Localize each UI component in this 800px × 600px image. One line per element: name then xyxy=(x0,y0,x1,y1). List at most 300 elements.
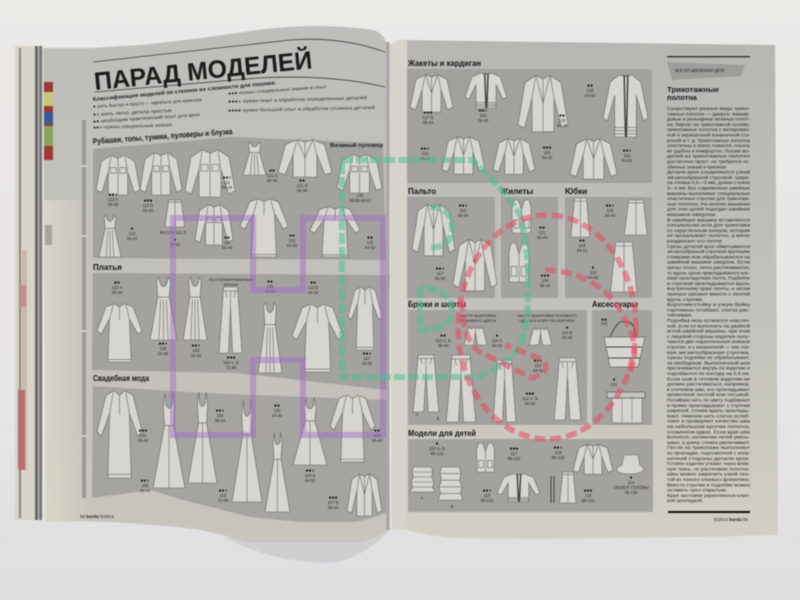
dress 122 А: 36-44 xyxy=(112,290,123,295)
left page light margin xyxy=(43,200,92,522)
knitted pullover: Вязаный пуловер xyxy=(330,142,383,149)
coat 117: 36-50 xyxy=(435,276,446,281)
sidebar article text: за свободным. Выполненный шов xyxy=(667,359,751,365)
dress 112 Б: 44-52 xyxy=(308,290,319,295)
bag xyxy=(600,317,645,367)
shirt 113 Б: ●●● xyxy=(143,198,153,204)
trousers 112: ●●● xyxy=(525,391,535,397)
jacket 118: 44-52 xyxy=(622,158,633,163)
sidebar article text: зигзагообразной строчкой крупными xyxy=(667,248,750,254)
belted wrap xyxy=(607,377,645,423)
child jacket 118: ●●◖ xyxy=(553,445,563,451)
panel: dresses xyxy=(92,273,390,390)
sidebar article text: то вдоль среза прикладывается кле- xyxy=(667,270,750,275)
halter gown: 36-44 xyxy=(215,418,226,423)
child skirt and belt: 98-122 xyxy=(581,498,595,503)
long shirt: 36-44 xyxy=(222,185,233,190)
top: 36-44 xyxy=(267,178,278,183)
classification legend: ●◖ шить легко, детали простые xyxy=(93,108,172,117)
sidebar article text: не прокалывает полотно, а мягко xyxy=(667,233,750,238)
jacket 127 Б: 127 Б xyxy=(423,115,434,120)
skirt 119: ●●◖ xyxy=(605,203,615,209)
vest 121: 121 xyxy=(538,230,546,235)
hat: ОБХВАТ ГОЛОВЫ xyxy=(613,485,649,490)
sidebar article text: Края застежки укрепляются клее- xyxy=(667,493,750,498)
gown 116 xyxy=(218,400,262,503)
slip dress xyxy=(258,279,282,373)
pink pattern shorts: РОЗОВОГО ЦВЕТА xyxy=(460,318,496,323)
sidebar article text: обенных знаний и приемов. xyxy=(667,163,727,169)
watermark: purple outline xyxy=(173,218,383,435)
pink pattern shorts: 114 А xyxy=(492,338,503,343)
sidebar article text: ночной стороны детали кроя. xyxy=(667,455,750,461)
gown 105: 34-44 xyxy=(140,488,151,493)
slim trousers: 110 xyxy=(535,363,542,368)
dress 112 Б: 112 Б xyxy=(308,285,319,290)
sidebar article text: специальная игла для трикотажа xyxy=(667,223,750,228)
vest 121 xyxy=(512,200,548,240)
tiered skirt: 44-52 xyxy=(588,275,599,280)
jacket 118 xyxy=(570,139,633,179)
skirt 118 xyxy=(571,198,590,253)
sidebar article text: их удобно и комфортно. Пошив мо- xyxy=(667,148,750,153)
panel: coats xyxy=(407,197,497,298)
knitted pullover xyxy=(330,142,383,203)
hat xyxy=(613,455,649,495)
trousers 112: 44-52 xyxy=(525,401,536,406)
sidebar section tag xyxy=(667,62,745,80)
cardigan 125: ●● xyxy=(587,83,593,89)
child jacket xyxy=(480,474,540,503)
pink pattern shorts: 112 А, Б xyxy=(435,338,451,343)
blouse 111 xyxy=(195,205,233,250)
sidebar article text: ных полотен. На многих машинах xyxy=(667,201,751,206)
bag: 142 xyxy=(600,321,608,326)
biker jacket: 36-42 xyxy=(420,156,431,161)
classification legend: Классификация моделей по степени их сложности для пошива: xyxy=(93,79,277,103)
magazine paper stack xyxy=(15,46,43,520)
halter gown: ●●◖ xyxy=(215,408,225,414)
sidebar article text: со скругленным концом, которая xyxy=(667,228,751,233)
pink pattern shorts right: ● xyxy=(565,325,569,331)
pink pattern shorts right xyxy=(517,313,577,345)
long flowing cardigan: 103 xyxy=(558,118,566,123)
dress 122 А: ●● xyxy=(114,280,120,286)
top, pattern 111 Б xyxy=(160,200,186,247)
shrug: ●●● xyxy=(328,495,338,501)
sidebar article text: сложенном вдвое. Если края шва xyxy=(667,429,750,434)
pink pattern shorts: ●● xyxy=(440,333,446,339)
vest 104: 104 xyxy=(542,278,549,283)
sidebar article text: роной и т. д. Трикотажные полотна xyxy=(667,137,750,143)
heading: shirts and tops: Рубашки, топы, туники, пуловеры и блузка xyxy=(92,127,233,146)
dress 122 А: 122 А xyxy=(112,285,123,290)
sidebar article text: тажных полотен — джерси, жаккар- xyxy=(667,111,750,116)
dress 130: 130 xyxy=(274,408,281,413)
sidebar article text: эластичные строчки для трикотаж- xyxy=(667,196,750,201)
dress with sleeves: 104 xyxy=(374,433,381,438)
child jacket: 98-122 xyxy=(480,498,494,503)
wrap blouse xyxy=(278,140,332,193)
heading: vests: Жилеты xyxy=(500,187,533,196)
sidebar article text: должен растягиваться, например, xyxy=(667,382,750,387)
sidebar article text: для этих целей подходит швейная xyxy=(667,206,751,212)
child jacket 118: 98-122 xyxy=(551,455,565,460)
heading: trousers and shorts: Брюки и шорты xyxy=(408,300,466,309)
child vest: 98-122 xyxy=(507,456,521,461)
dress 106 Б xyxy=(293,398,327,483)
hat: ● xyxy=(629,475,633,481)
long shirt xyxy=(185,150,235,197)
wrap blouse: 121 Б xyxy=(297,183,308,188)
panel: bridal fashion xyxy=(92,386,387,522)
gown 116: 72-88 xyxy=(218,498,229,503)
blouse 111: 111 xyxy=(224,240,231,245)
classification legend: ● шить быстро и просто — идеально для новичков xyxy=(93,97,202,109)
dress 130: ●● xyxy=(274,403,280,409)
tunic: ●●◖ xyxy=(362,351,372,357)
gown 116: ●●◖ xyxy=(218,488,228,494)
sidebar article text: Подгибка низа останется эластич- xyxy=(667,318,750,323)
panel: vests xyxy=(501,197,558,298)
sidebar article text: иглой швейной машины, при этом xyxy=(667,328,750,334)
coat 110 xyxy=(412,203,469,256)
shirt 113 Б: 34-42 xyxy=(143,208,154,213)
jacket 118: ●●◖ xyxy=(622,148,632,154)
heading: coats: Пальто xyxy=(408,187,436,196)
sidebar article text: срезы плохо, легко растягиваются, xyxy=(667,265,750,270)
tank dress xyxy=(99,215,138,257)
belted wrap: ● xyxy=(612,377,616,383)
jumpsuit: БРЮКИ xyxy=(224,282,238,287)
trousers Б: Б xyxy=(437,416,440,421)
sidebar article text: припуск срезают вместе с лентой xyxy=(667,290,750,296)
gown 116: 116 xyxy=(220,493,227,498)
blouse 121: 44-52 xyxy=(365,245,376,250)
dress 122 А xyxy=(97,280,142,362)
jumpsuit: 116 А, Б xyxy=(223,360,239,365)
jumpsuit xyxy=(209,277,253,370)
vertical imprint text xyxy=(80,120,88,498)
child jacket 118 xyxy=(551,444,613,474)
sidebar article text: тягивая. xyxy=(667,313,693,318)
sidebar heading: Трикотажные xyxy=(667,85,719,94)
hat: 114 xyxy=(628,480,635,485)
blouse 122: 44-52 xyxy=(287,243,298,248)
classification legend, second column: ●●●● нужен большой опыт в обработке сложных деталей xyxy=(228,104,375,113)
dress 155: 155 xyxy=(160,346,167,351)
sidebar article text: притачивается внутрь по изделию и xyxy=(667,366,750,371)
child jacket: 119 xyxy=(484,493,491,498)
dress 106 Б: 44-52 xyxy=(305,478,316,483)
jacket 118: 118 xyxy=(624,153,631,158)
frill skirt A xyxy=(410,467,435,500)
pink pattern shorts: ● xyxy=(495,333,499,339)
sidebar article text: шириной, стежки вдоль проклады- xyxy=(667,407,750,413)
slip dress: ●● xyxy=(267,279,273,285)
bag: ●● xyxy=(601,317,607,323)
sidebar article text: подгибается по контуру на 0,5 см. xyxy=(667,371,750,376)
sidebar article text: внутреннему краю ленты, а затем xyxy=(667,286,750,291)
sidebar article text: вают. Нижнюю нить слегка ослаб- xyxy=(667,413,750,418)
jumpsuit: КОСТЮМИРОВАННЫЕ xyxy=(209,277,253,282)
sidebar section tag: ВСЁ ПО ШВЕЙНОМУ ДЕЛУ xyxy=(675,66,725,73)
vest 104: 36-44 xyxy=(540,283,551,288)
sidebar article text: Детали кроя соединяются узкой xyxy=(667,169,750,175)
shirt 113 Б xyxy=(140,153,182,213)
jumpsuit: 72-88 xyxy=(226,365,237,370)
sidebar article text: Если шов в готовом изделии не xyxy=(667,376,750,381)
jacket 116: 116 xyxy=(544,150,551,155)
trousers 112: 112 А, Б xyxy=(522,396,538,401)
shirt 113 A: ●●◖ xyxy=(108,192,118,198)
sidebar article text: той из тонкого клеевого флизелина. xyxy=(667,476,750,482)
child vest xyxy=(476,443,521,472)
top, pattern 111 Б: ● xyxy=(173,237,177,243)
jacket 127 Б: ●●● xyxy=(423,110,433,116)
skirt 119: 119 xyxy=(607,208,614,213)
classification legend xyxy=(93,79,277,130)
left page xyxy=(43,26,390,543)
sidebar article text: зигзагообразной строчкой: шири- xyxy=(667,174,750,180)
skirt 118: 34-42 xyxy=(577,248,588,253)
panel: skirts xyxy=(565,197,652,298)
watermark: red dashed circles xyxy=(458,215,636,439)
skirt 119: 36-44 xyxy=(605,213,616,218)
sidebar article text: Вместо строчки и подгибки можно xyxy=(667,482,750,487)
jacket 102: ●●◖ xyxy=(478,108,488,114)
shrug: 36-44 xyxy=(328,505,339,510)
sidebar article text: волнятся, натяжение нитей умень- xyxy=(667,434,750,440)
blouse 121: 121 xyxy=(366,240,374,245)
tank dress: ● xyxy=(130,226,134,232)
shirt 113 A: 113 А xyxy=(108,197,119,202)
right page gutter xyxy=(389,40,407,530)
child jacket 118: 118 xyxy=(555,450,562,455)
right page xyxy=(389,40,778,539)
sidebar article text: Швы можно закрепить узкой лен- xyxy=(667,471,750,477)
blouse 122: 122 xyxy=(288,238,296,243)
classification legend: ●●◖ нужны специальные знания xyxy=(93,122,172,130)
jacket 102: 102 xyxy=(480,113,487,118)
panel: jackets and cardigan xyxy=(407,69,652,183)
dress 130 xyxy=(265,403,290,512)
top: ●● xyxy=(269,168,275,174)
skirt 119 xyxy=(605,200,647,235)
sidebar article text: ляют и проверяют качество шва xyxy=(667,419,750,424)
sidebar article text: горловины отгибают, слегка рас- xyxy=(667,307,751,312)
heading: jackets and cardigan: Жакеты и кардиган xyxy=(407,59,481,68)
sidebar article text: довые и рельефные вязаные полот- xyxy=(667,117,750,122)
classification legend: ●● необходим практический опыт для кроя xyxy=(93,111,200,124)
sidebar article text: делей из трикотажных полотен xyxy=(667,153,750,159)
coat dress: ●●● xyxy=(138,428,148,434)
classification legend, second column: ●●● нужны специальные знания и опыт xyxy=(228,84,328,96)
sidebar article text xyxy=(667,106,751,503)
blouse 122 xyxy=(240,199,298,257)
dress 155 Б: 155 xyxy=(192,348,200,353)
sidebar article text: Петли на трикотаже выполняют xyxy=(667,445,751,450)
sidebar article text: с лицевой стороны изделия полу- xyxy=(667,333,750,339)
belted wrap: 101 xyxy=(610,382,618,387)
sidebar article text: шают, а длину стежка увеличивают. xyxy=(667,440,750,445)
sidebar article text: ной и окрашенной изнаночной сто- xyxy=(667,132,750,138)
halter gown: 106 xyxy=(216,413,224,418)
sidebar article text: кая зигзагообразная строчка. xyxy=(667,350,750,355)
child skirt and belt: ●●● xyxy=(583,488,593,494)
biker jacket: 115 xyxy=(422,151,429,156)
knitted pullover: 36/38,40/42 xyxy=(349,198,372,203)
blouse 111: 36-44 xyxy=(222,245,233,250)
jacket 116: ●●● xyxy=(542,145,552,151)
gown 105 xyxy=(140,393,185,493)
gutter shadow xyxy=(386,42,390,530)
frill skirt Б: ● xyxy=(435,441,439,447)
long flowing cardigan: ●● xyxy=(559,113,565,119)
heading: bridal fashion: Свадебная мода xyxy=(93,374,149,383)
sidebar top rule xyxy=(667,56,750,57)
sidebar article text: по прокладке, подложенной с изна- xyxy=(667,450,750,456)
heading: dresses: Платья xyxy=(93,263,122,272)
tunic: 44-52 xyxy=(362,361,373,366)
title: ПАРАД МОДЕЛЕЙ xyxy=(93,44,314,96)
cardigan 125: 125 xyxy=(586,88,594,93)
sidebar article text: ной, если ее выполнить на двойной xyxy=(667,322,750,328)
trousers Б xyxy=(437,355,476,422)
coat dress xyxy=(97,391,149,478)
vest 104 xyxy=(509,243,551,288)
heading: models for children: Модели для детей xyxy=(408,429,476,438)
long flowing cardigan: 36-44 xyxy=(557,123,568,128)
blouse 121 xyxy=(310,207,376,257)
dress 155: 34-42 xyxy=(158,351,169,356)
dress 155 Б: ●●◖ xyxy=(191,343,201,349)
coat 110: ●●◖ xyxy=(458,203,468,209)
biker jacket: ●●◖ xyxy=(420,146,430,152)
child skirt and belt: 119 xyxy=(585,493,592,498)
shirt 113 Б: 113 Б xyxy=(143,203,154,208)
hat: 55 СМ xyxy=(625,490,638,495)
gown 105: ●●◖ xyxy=(140,478,150,484)
heading: skirts: Юбки xyxy=(565,187,587,196)
child jacket: ●●◖ xyxy=(482,488,492,494)
jumpsuit: ●●● xyxy=(226,355,236,361)
jacket 102 xyxy=(465,73,507,123)
sidebar article text: Срезы деталей кроя обметываются xyxy=(667,243,750,249)
frill skirt Б: 116 А, Б xyxy=(429,446,445,451)
sidebar article text: вой прокладкой. xyxy=(667,497,703,503)
jacket 116: 34-42 xyxy=(542,155,553,160)
biker jacket xyxy=(420,137,485,174)
dress 130: 34-42 xyxy=(272,413,283,418)
long flowing cardigan xyxy=(518,75,568,132)
long shirt: 111 xyxy=(224,180,231,185)
frill skirt A: А xyxy=(421,495,424,500)
skirt 118: 118 xyxy=(579,243,586,248)
jacket 116 xyxy=(493,139,553,174)
trousers A xyxy=(413,355,439,417)
shirt 113 A: 36-50 xyxy=(108,202,119,207)
vest 104: ●●● xyxy=(540,273,550,279)
frill skirt Б: Б xyxy=(451,504,454,509)
sidebar article text: Потайную нить по цвету подбирают xyxy=(667,396,751,402)
top, pattern 111 Б: ФАСОН 111 Б xyxy=(160,230,186,235)
tank dress: 110 xyxy=(129,231,136,236)
tunic: 117 xyxy=(364,356,371,361)
tunic xyxy=(348,287,382,366)
dress 106 Б: ●●◖ xyxy=(305,468,315,474)
title rules xyxy=(93,39,385,92)
coat dress: 36-44 xyxy=(138,438,149,443)
classification legend, second column xyxy=(228,84,375,113)
sidebar article text: и прямо прокладывают с строчки xyxy=(667,403,750,408)
sidebar article text: Срезы подгибки не обрабатывают, xyxy=(667,355,750,360)
long shirt: ●●◖ xyxy=(222,175,232,181)
sidebar article text: и строчкой прокладывается вдоль xyxy=(667,280,751,286)
sidebar article text: В швейную машину вставляется xyxy=(667,216,751,222)
tank dress: 34-42 xyxy=(127,236,138,241)
cardigan 125: 44-52 xyxy=(585,93,596,98)
sidebar article text: Готовое изделие утюжат через влаж- xyxy=(667,461,750,466)
panel: trousers and shorts xyxy=(408,310,587,425)
pink pattern shorts right: ЦВЕТА И КОРР. ПО ШИРИНЕ xyxy=(519,318,575,323)
sidebar article text: швейной машине оверлок. Если xyxy=(667,259,750,265)
sidebar article text: оставить срез открытым. xyxy=(667,488,727,493)
cardigan 125 xyxy=(585,75,648,137)
tiered skirt: 116 xyxy=(590,270,597,275)
wrap blouse: ●● xyxy=(299,178,305,184)
blouse 111: ●● xyxy=(224,235,230,241)
top, pattern 111 Б: 34-42 xyxy=(170,242,181,247)
page shadow xyxy=(225,528,392,563)
trousers 112 xyxy=(522,358,581,420)
frill skirt Б: 98-122 xyxy=(430,451,444,456)
trousers A: А xyxy=(416,412,419,417)
jacket 127 Б: 36-44 xyxy=(423,120,434,125)
blouse 122: ●● xyxy=(289,233,295,239)
pink pattern shorts right: 34-42 xyxy=(562,335,573,340)
sidebar article text: на небольшом кусочке полотна, xyxy=(667,424,750,429)
coat 110: 36-44 xyxy=(458,213,469,218)
coat 117: 117 xyxy=(437,271,444,276)
sidebar article text: эластичны и мягко ложатся, носить xyxy=(667,143,751,148)
dress 112 Б xyxy=(292,280,343,372)
sidebar article text: на, бархат на трикотажной основе, xyxy=(667,121,750,127)
watermark: green dashed outline xyxy=(342,160,528,377)
pink pattern shorts: 36-44 xyxy=(438,343,449,348)
tiered skirt: ● xyxy=(591,265,595,271)
slip dress: 120 xyxy=(266,284,274,289)
coat dress: 101 xyxy=(140,433,147,438)
halter gown xyxy=(188,392,226,483)
shrug: 107 Б xyxy=(328,500,339,505)
sidebar article text: машины выполняют специальные xyxy=(667,191,750,196)
heading: accessories: Аксессуары xyxy=(592,300,638,309)
panel: models for children xyxy=(408,439,653,512)
child vest: ●●● xyxy=(509,446,519,452)
pink pattern shorts: 34-42 xyxy=(492,343,503,348)
sidebar article text: 3—4 мм. Все современные швейные xyxy=(667,184,750,190)
tiered skirt xyxy=(588,242,637,292)
jacket 127 Б xyxy=(410,75,453,125)
footer left: 66 burda 5/2014 xyxy=(80,514,114,519)
child vest: 117 xyxy=(511,451,518,456)
frill skirt Б xyxy=(429,441,463,509)
shrug xyxy=(328,474,382,516)
slim trousers: ●●◖ xyxy=(533,358,543,364)
knitted pullover: 145 xyxy=(356,193,364,198)
classification legend, second column: ●●●◖ нужен опыт в обработке определенных деталей xyxy=(228,94,367,104)
